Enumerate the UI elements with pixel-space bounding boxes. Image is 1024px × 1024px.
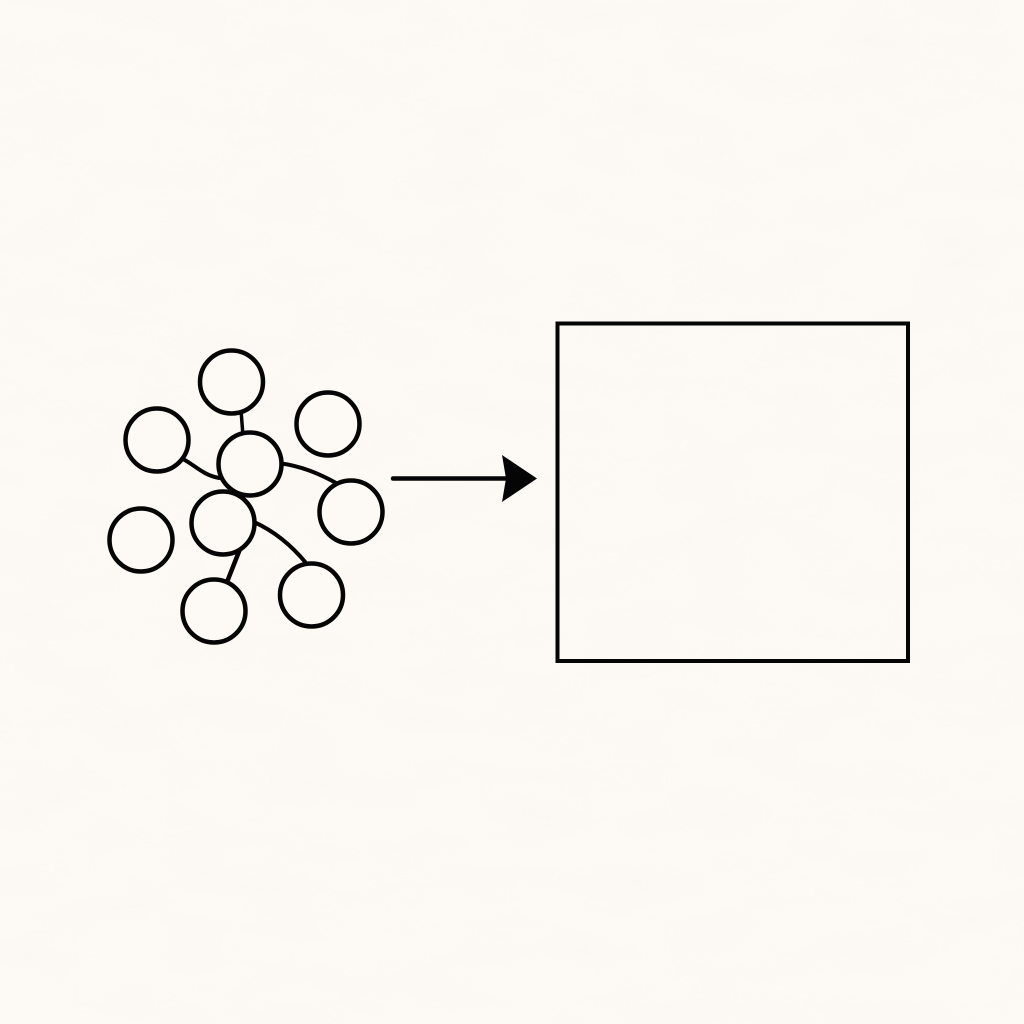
empty square: [558, 324, 908, 661]
circle nodes: [110, 350, 382, 642]
node cluster diagram: [110, 350, 382, 642]
connector lines: [183, 410, 338, 582]
arrow: [393, 455, 537, 502]
